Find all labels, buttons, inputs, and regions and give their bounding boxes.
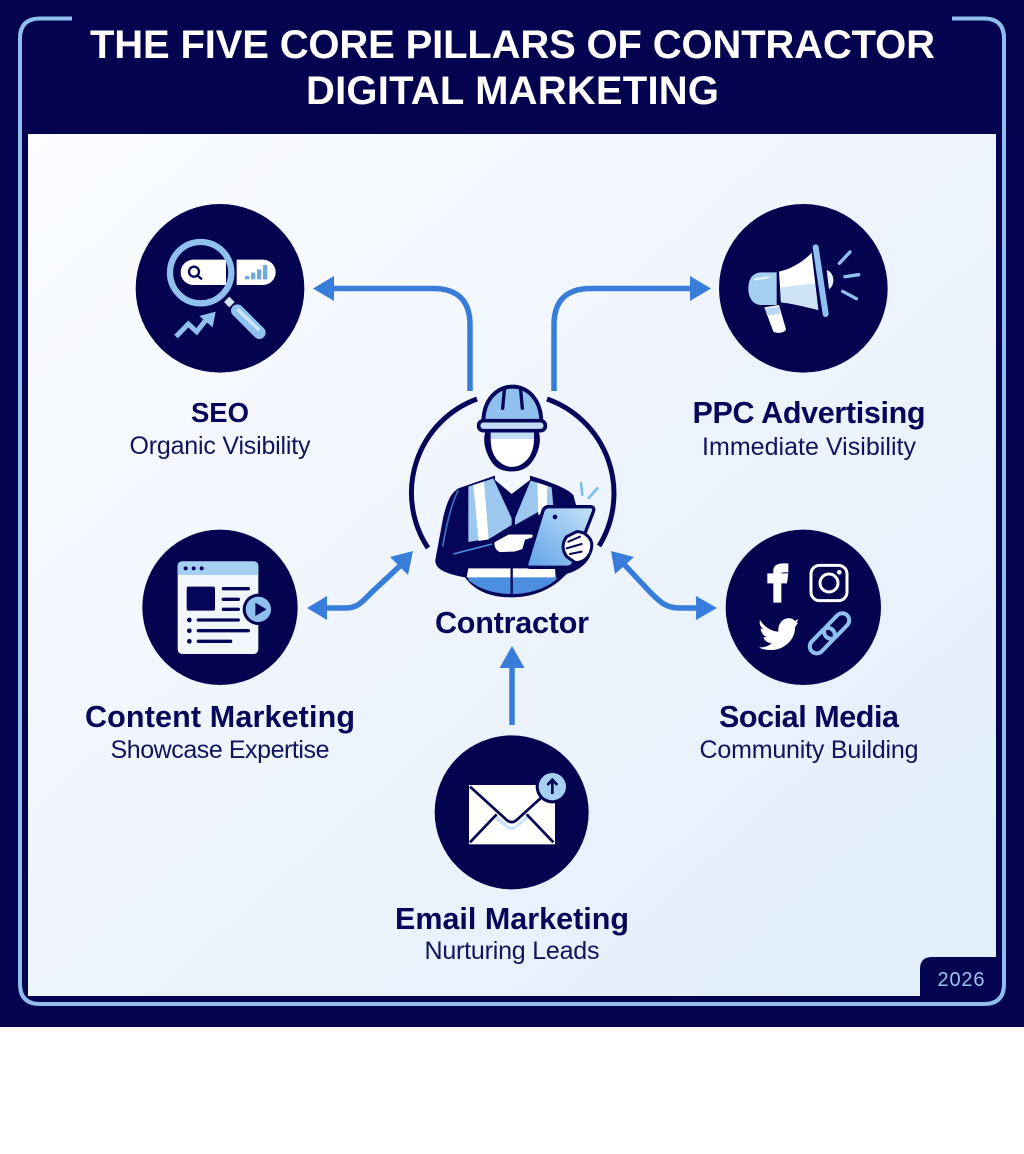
arrow: to SEO	[313, 276, 470, 391]
email marketing label: Email Marketing	[395, 902, 629, 936]
arrow: email up	[500, 646, 524, 725]
icon: megaphone	[719, 204, 888, 373]
pillar: SEO: Organic Visibility	[130, 432, 311, 460]
title: THE FIVE CORE PILLARS OF CONTRACTOR	[90, 23, 935, 67]
sleeve highlight	[453, 543, 495, 554]
pillar: content marketing: Showcase Expertise	[110, 736, 330, 764]
title: DIGITAL MARKETING	[306, 69, 719, 113]
pillar: email marketing	[395, 735, 629, 965]
year badge	[920, 957, 996, 996]
main panel	[28, 134, 996, 996]
pillar: content marketing	[85, 530, 355, 764]
icon: web page	[142, 530, 298, 685]
contractor figure	[435, 387, 597, 597]
vest right	[515, 481, 554, 525]
icon: social logos	[726, 530, 881, 685]
PPC label: PPC Advertising	[692, 396, 926, 430]
contractor label: Contractor	[435, 606, 589, 640]
arrow: content marketing two-way	[307, 551, 413, 620]
arrow: social media two-way	[611, 551, 717, 620]
pillar: SEO	[130, 204, 311, 460]
pillar: social media	[700, 530, 918, 764]
contractor ring	[411, 399, 614, 548]
social media label: Social Media	[719, 700, 900, 734]
pillar: social media: Community Building	[700, 736, 918, 764]
vest left	[468, 478, 512, 542]
tablet	[527, 507, 594, 567]
neck	[495, 469, 530, 494]
body	[435, 475, 590, 597]
pillar: email marketing: Nurturing Leads	[424, 937, 600, 965]
icon: envelope	[435, 735, 589, 889]
pillar: PPC advertising	[692, 204, 926, 461]
sparks	[581, 483, 597, 498]
icon: magnifier	[136, 204, 304, 373]
pointing hand	[493, 533, 534, 553]
helmet	[483, 387, 541, 423]
year badge: 2026	[938, 969, 984, 991]
vest bottom	[468, 569, 557, 594]
SEO label: SEO	[191, 397, 249, 428]
holding hand	[563, 532, 592, 562]
arrow: to PPC	[554, 276, 711, 391]
central contractor	[411, 387, 614, 640]
title	[90, 23, 935, 113]
hair and face	[484, 430, 540, 471]
content marketing label: Content Marketing	[85, 700, 355, 734]
pillar: PPC advertising: Immediate Visibility	[702, 433, 916, 461]
